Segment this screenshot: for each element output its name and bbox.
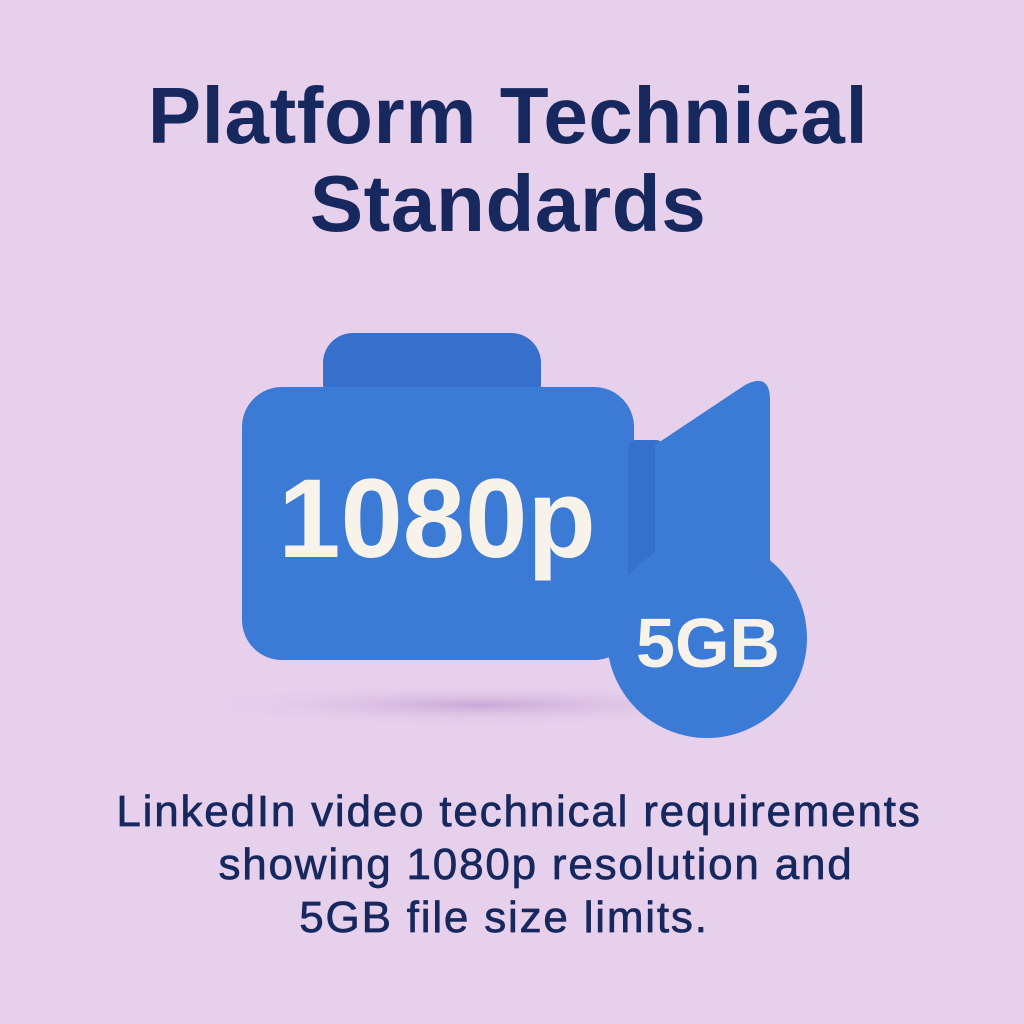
caption	[116, 787, 922, 942]
text: 5GB: 5GB	[636, 604, 780, 682]
title: Platform Technical	[148, 71, 868, 160]
text: LinkedIn video technical requirements	[116, 787, 922, 836]
text: showing 1080p resolution and	[218, 840, 854, 889]
title: Standards	[310, 159, 706, 248]
text: 1080p: 1080p	[278, 456, 596, 581]
title	[148, 71, 868, 248]
text: 5GB file size limits.	[299, 893, 709, 942]
